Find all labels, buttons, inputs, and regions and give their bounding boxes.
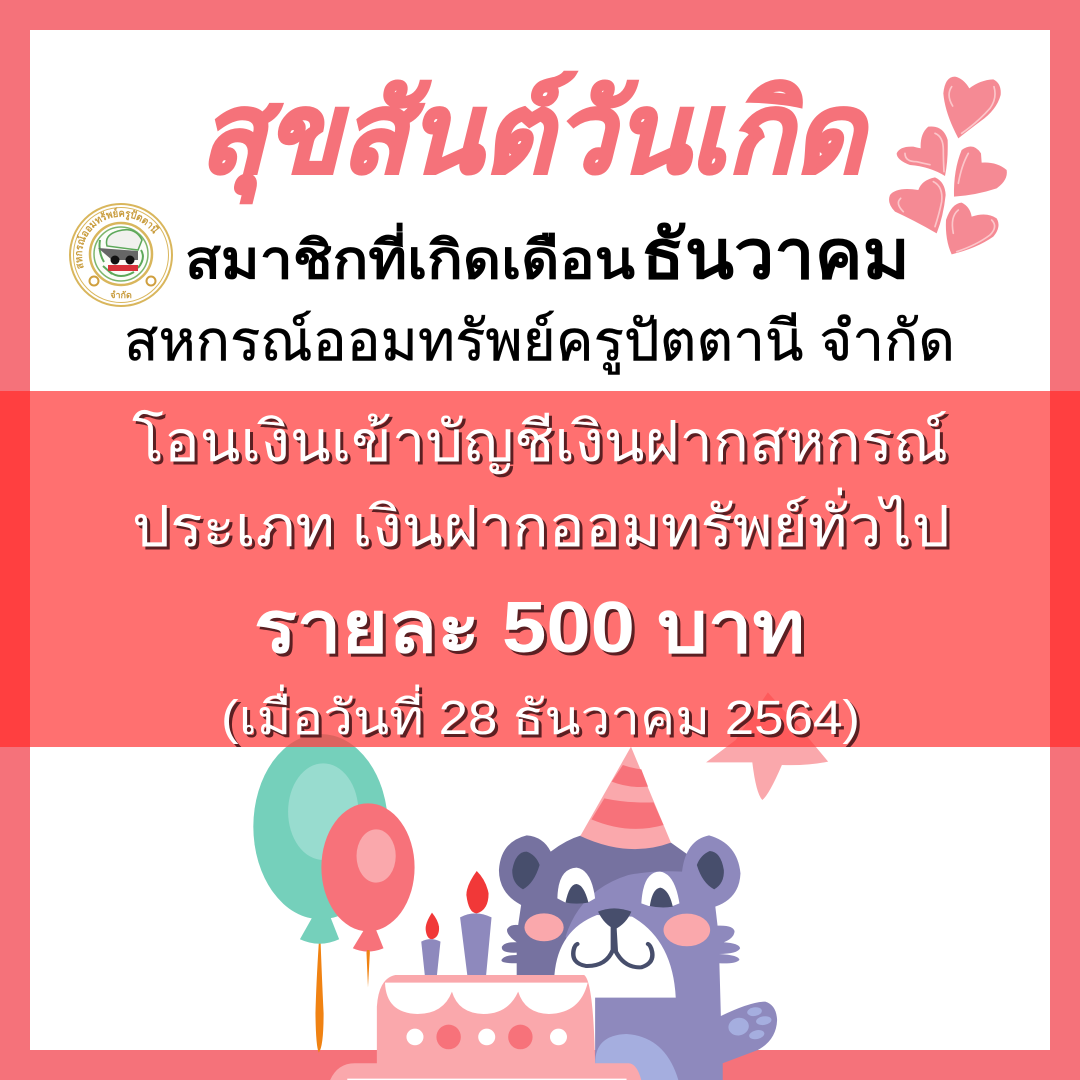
- bear belly: [595, 1034, 678, 1080]
- text block: transfer details: รายละ 500 บาท: [254, 588, 805, 668]
- bear ears: [512, 851, 724, 889]
- bear muzzle: [554, 915, 676, 998]
- icon: birthday candles: [421, 871, 492, 977]
- bear cheeks: [524, 913, 710, 946]
- icon: bear: [499, 835, 777, 1080]
- bear paw pads: [725, 1006, 772, 1041]
- text block: transfer details: โอนเงินเข้าบัญชีเงินฝากสหกรณ์: [132, 409, 948, 474]
- text block: transfer details: ประเภท เงินฝากออมทรัพย์ทั่วไป: [132, 487, 950, 559]
- icon: cooperative seal: จำกัด: [110, 290, 132, 300]
- panel: red translucent band: [0, 391, 1080, 747]
- icon: pink balloon: [321, 803, 415, 987]
- title: สุขสันต์วันเกิด: [199, 71, 870, 203]
- icon: teal balloon: [253, 734, 388, 1053]
- illustration: birthday bear, cake and balloons: [253, 692, 828, 1080]
- icon: star decoration: [706, 692, 828, 800]
- icon: party hat: [580, 747, 671, 849]
- heading: members born in December: [185, 217, 910, 293]
- text block: transfer details: (เมื่อวันที่ 28 ธันวาคม 2564): [221, 684, 860, 745]
- bear nose and mouth: [573, 908, 652, 967]
- icon: cooperative seal: สหกรณ์ออมทรัพย์ครูปัตตานี: [76, 207, 160, 269]
- icon: cooperative seal: [69, 203, 173, 307]
- icon: hearts cluster: [889, 77, 1007, 254]
- heading: members born in December: สมาชิกที่เกิดเดือน: [185, 222, 635, 290]
- text block: transfer details: [132, 409, 950, 745]
- bear eyes: [557, 868, 679, 908]
- icon: birthday cake: [329, 975, 642, 1080]
- heading: cooperative name: สหกรณ์ออมทรัพย์ครูปัตตานี จำกัด: [124, 309, 955, 375]
- heading: members born in December: ธันวาคม: [641, 217, 910, 293]
